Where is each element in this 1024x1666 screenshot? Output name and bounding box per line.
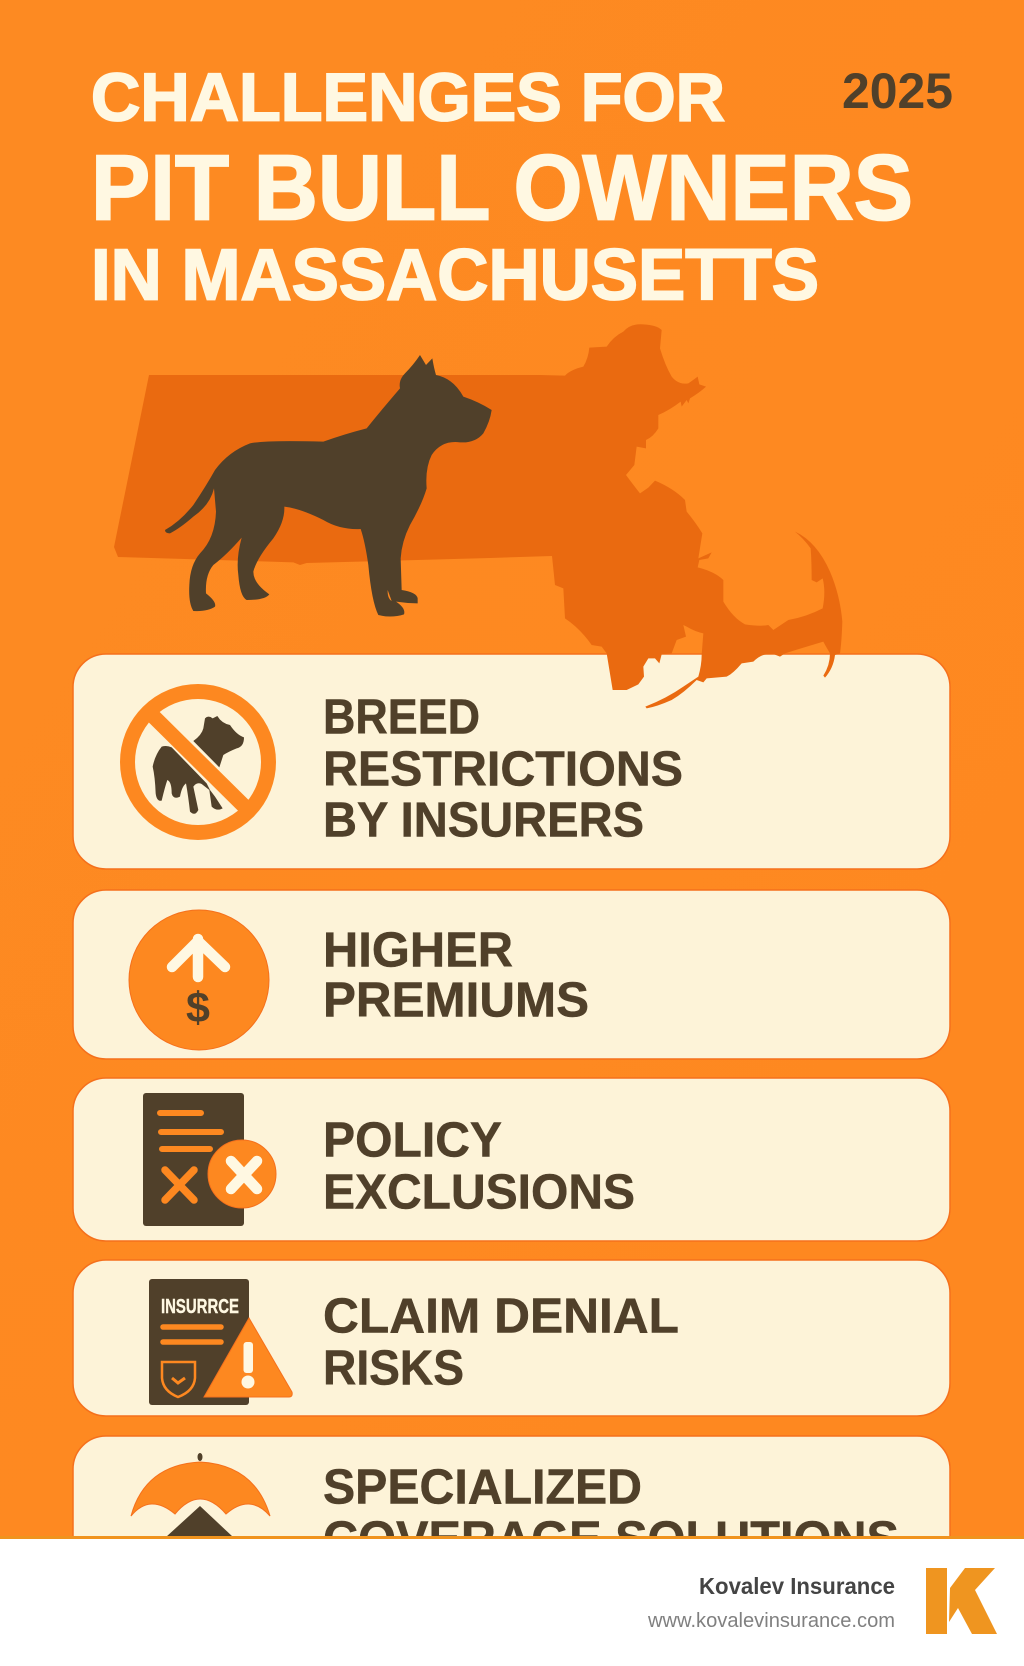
map: Massachusetts silhouette [114, 324, 842, 708]
title: PIT BULL OWNERS [91, 136, 913, 240]
year: 2025 [842, 63, 953, 119]
icon: umbrella over house [131, 1453, 270, 1537]
icon: no dogs sign [128, 692, 268, 832]
heading: higher premiums: PREMIUMS [323, 972, 589, 1028]
icon: premium increase [129, 910, 269, 1050]
website: www.kovalevinsurance.com [647, 1610, 895, 1632]
heading: breed restrictions by insurers: RESTRICTIONS [323, 742, 683, 796]
heading: policy exclusions: EXCLUSIONS [323, 1164, 635, 1220]
heading: breed restrictions by insurers: BY INSURERS [323, 792, 644, 848]
footer [0, 1536, 1024, 1666]
panel: specialized coverage solutions [73, 1436, 950, 1586]
heading: breed restrictions by insurers: BREED [323, 690, 480, 744]
heading: breed restrictions by insurers [323, 690, 683, 848]
heading: specialized coverage solutions: COVERAGE SOLUTIONS [323, 1512, 899, 1566]
heading: claim denial risks: RISKS [323, 1340, 464, 1396]
icon: insurance warning: INSURRCE [161, 1295, 239, 1318]
panel: policy exclusions [73, 1078, 950, 1241]
panel: claim denial risks [73, 1260, 950, 1416]
panel: higher premiums [73, 890, 950, 1059]
heading: higher premiums: HIGHER [323, 922, 513, 978]
title: CHALLENGES FOR [91, 60, 725, 136]
icon: insurance warning [149, 1279, 292, 1405]
heading: policy exclusions [323, 1112, 635, 1220]
icon: premium increase: $ [186, 984, 210, 1032]
heading: policy exclusions: POLICY [323, 1112, 502, 1168]
heading: specialized coverage solutions: SPECIALIZED [323, 1460, 642, 1514]
icon: pit bull silhouette [165, 355, 492, 617]
panel: breed restrictions [73, 654, 950, 869]
icon: excluded document [143, 1093, 276, 1226]
title [91, 60, 913, 316]
heading: claim denial risks: CLAIM DENIAL [323, 1288, 679, 1344]
heading: claim denial risks [323, 1288, 679, 1396]
heading: higher premiums [323, 922, 589, 1028]
logo: K [926, 1568, 997, 1634]
title: IN MASSACHUSETTS [91, 236, 819, 316]
heading: specialized coverage solutions [323, 1460, 899, 1566]
company name: Kovalev Insurance [699, 1573, 895, 1599]
